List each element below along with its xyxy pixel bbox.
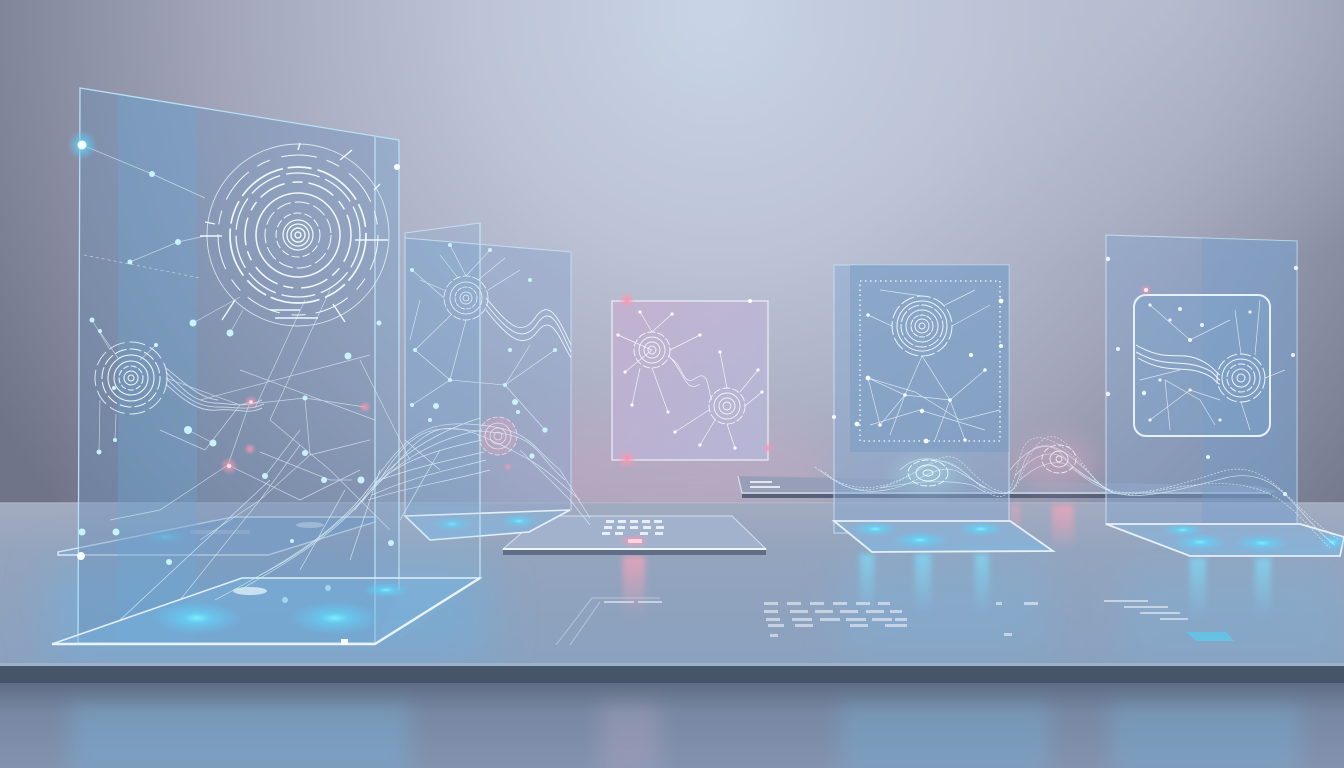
back plate <box>738 476 1276 498</box>
glass sheet <box>834 265 1009 533</box>
glowing corners <box>618 291 636 309</box>
panel 2: tall folded glass panel <box>405 223 571 540</box>
back-left base plate <box>58 517 375 555</box>
rounded frame <box>1134 295 1270 436</box>
table markings: small data blocks <box>556 598 1234 645</box>
glowing node top-left <box>67 130 97 160</box>
network lines <box>82 145 410 600</box>
base plate <box>834 521 1053 552</box>
large radar circle <box>200 143 389 326</box>
pink glow node <box>479 417 517 455</box>
background wall <box>0 0 1344 530</box>
panel 4: centre-right glass panel <box>832 265 1053 552</box>
base plate <box>405 510 570 540</box>
floating nodes on streams <box>896 436 1095 488</box>
front base plate <box>52 578 480 645</box>
circular network node <box>868 290 1000 440</box>
pink glowing nodes <box>220 395 371 475</box>
centre base plate <box>503 516 766 555</box>
small circular node <box>95 342 167 414</box>
table front edge <box>0 663 1344 683</box>
panel 1: large left glass panel <box>67 88 480 643</box>
lower reflection <box>0 683 1344 768</box>
panel 3: centre pink panel <box>612 291 774 469</box>
table surface <box>0 502 1344 666</box>
flowing data streams <box>120 418 1340 620</box>
panel 5: right glass panel <box>1106 235 1344 556</box>
base plate <box>1106 524 1344 556</box>
network nodes <box>77 164 400 603</box>
